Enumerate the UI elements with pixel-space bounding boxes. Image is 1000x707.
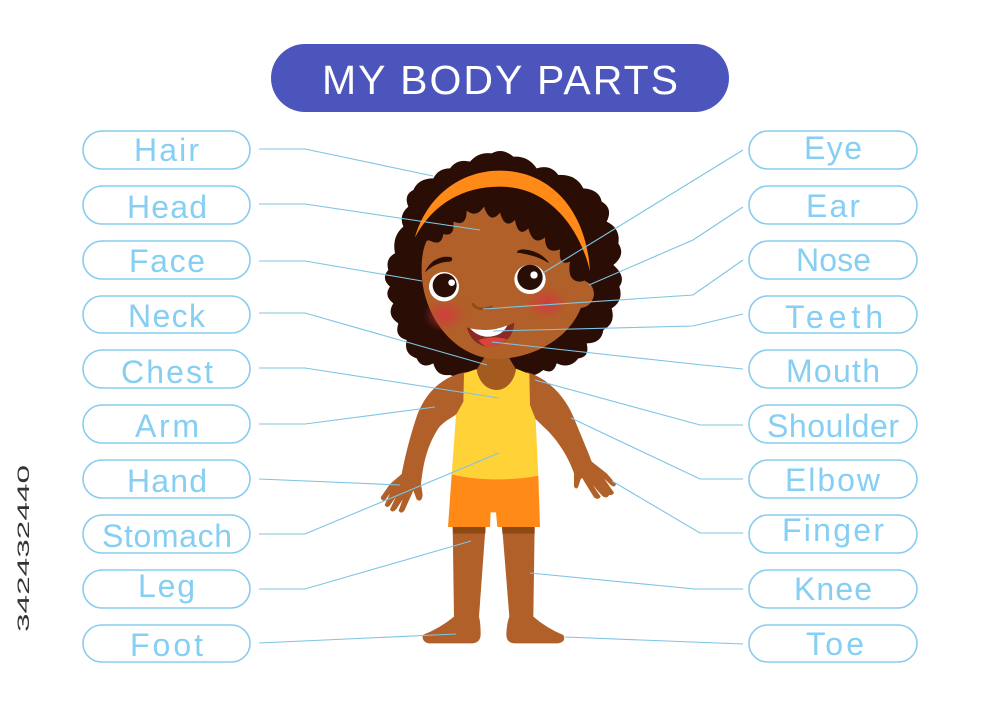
label: Toe xyxy=(749,625,917,662)
label: Neck: Neck xyxy=(128,298,206,334)
label: Hair xyxy=(83,131,250,169)
cheeks xyxy=(423,298,467,332)
label: Elbow xyxy=(749,460,917,498)
label: Teeth xyxy=(749,296,917,335)
label: Stomach: Stomach xyxy=(102,518,232,554)
label: Arm: Arm xyxy=(135,408,199,444)
label: Head xyxy=(83,186,250,225)
left eyebrow xyxy=(425,257,452,272)
title banner: MY BODY PARTS xyxy=(322,57,678,103)
label: Chest: Chest xyxy=(121,354,213,390)
label: Leg xyxy=(83,568,250,608)
label: Finger: Finger xyxy=(782,512,884,548)
right leg xyxy=(502,525,564,643)
label: Shoulder: Shoulder xyxy=(767,408,899,444)
nose xyxy=(473,304,492,309)
leg shadows xyxy=(453,525,535,534)
title banner xyxy=(271,44,729,112)
label: Mouth xyxy=(749,350,917,389)
label: Hand: Hand xyxy=(127,463,207,499)
right arm and hand xyxy=(523,372,616,499)
label: Knee xyxy=(749,570,917,608)
face xyxy=(422,205,585,359)
illustration: girl xyxy=(381,151,622,643)
label: Knee: Knee xyxy=(794,571,872,607)
arm shadows xyxy=(457,390,536,419)
left leg xyxy=(423,525,486,643)
fringe xyxy=(420,167,593,282)
label: Hand xyxy=(83,460,250,499)
tank top xyxy=(452,369,538,479)
label: Nose xyxy=(749,241,917,279)
label: Mouth: Mouth xyxy=(786,353,880,389)
label: Hair: Hair xyxy=(134,132,199,168)
label: Teeth: Teeth xyxy=(785,299,883,335)
left arm and hand xyxy=(381,372,470,513)
leader lines right xyxy=(483,150,743,644)
label: Toe: Toe xyxy=(806,626,864,662)
label: Foot: Foot xyxy=(130,627,203,663)
label: Face xyxy=(83,241,250,279)
ear xyxy=(577,280,594,308)
left labels column xyxy=(83,131,250,663)
leader lines left xyxy=(259,149,499,643)
label: Eye: Eye xyxy=(804,130,862,166)
shorts xyxy=(448,474,540,527)
label: Ear: Ear xyxy=(806,188,860,224)
left eye xyxy=(429,272,459,301)
right labels column xyxy=(749,130,917,662)
label: Head: Head xyxy=(127,189,207,225)
label: Arm xyxy=(83,405,250,444)
head xyxy=(415,167,594,359)
neck xyxy=(477,357,516,391)
label: Face: Face xyxy=(129,243,205,279)
label: Ear xyxy=(749,186,917,224)
hair back xyxy=(385,151,622,378)
right eye xyxy=(514,265,546,294)
right eyebrow xyxy=(517,249,549,263)
body xyxy=(381,357,616,643)
label: Elbow: Elbow xyxy=(785,462,881,498)
label: Leg: Leg xyxy=(138,568,195,604)
label: Chest xyxy=(83,350,250,390)
label: Finger xyxy=(749,512,917,553)
label: Nose: Nose xyxy=(796,242,871,278)
headband xyxy=(415,171,590,272)
label: Foot xyxy=(83,625,250,663)
mouth xyxy=(467,323,514,347)
stock image id: 342432440 xyxy=(14,465,33,632)
label: Neck xyxy=(83,296,250,334)
label: Eye xyxy=(749,130,917,169)
